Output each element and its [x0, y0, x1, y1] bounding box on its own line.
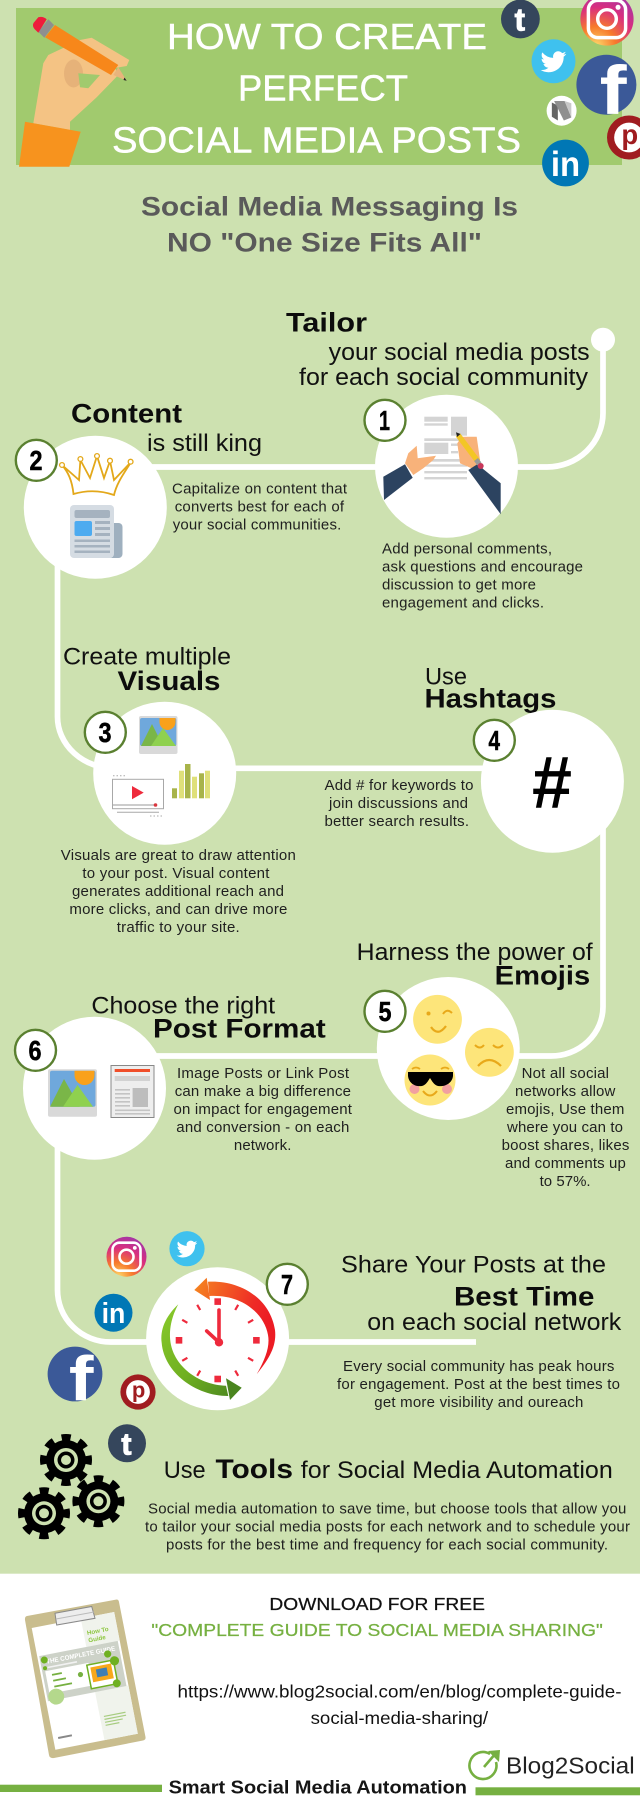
social icons around clock — [48, 1231, 205, 1462]
footer tagline with green rules — [0, 1777, 640, 1797]
icon: facebook — [48, 1345, 102, 1415]
circle illustration: hands editing document — [375, 395, 518, 538]
number badge 5 — [364, 991, 406, 1032]
number badge 3: 3 — [98, 717, 112, 748]
step 2: content — [16, 399, 348, 579]
icon: pinterest — [607, 116, 640, 160]
circle illustration: image, video and chart — [93, 702, 236, 845]
icon: linkedin — [94, 1294, 132, 1332]
icon: green circular arrow — [161, 1304, 242, 1400]
icon: medium — [547, 96, 577, 126]
heading: hashtags: Hashtags — [424, 683, 556, 713]
step 1: tailor — [286, 308, 590, 611]
body text: step 4: Add # for keywords to — [324, 777, 474, 794]
body text: step 7: Every social community has peak hours — [343, 1358, 614, 1375]
text: url: https://www.blog2social.com/en/blog/complete-guide- — [178, 1682, 622, 1702]
heading: visuals — [63, 644, 231, 696]
heading: emojis — [357, 939, 593, 990]
icon: instagram — [580, 0, 634, 46]
step 5: emojis — [357, 939, 629, 1190]
icon: linkedin: in — [551, 145, 580, 184]
text: download for free — [151, 1594, 603, 1640]
subtitle — [141, 192, 518, 258]
number badge 7: 7 — [281, 1269, 293, 1300]
icon: twitter — [169, 1231, 205, 1266]
connector path: step 2 to step 4 — [58, 507, 552, 768]
text: download for free: DOWNLOAD FOR FREE — [269, 1594, 485, 1614]
icon: red circular arrow — [194, 1278, 275, 1374]
icon: tumblr: t — [515, 3, 525, 38]
icon: twitter — [532, 39, 576, 83]
body text: step 4 — [324, 777, 474, 830]
body text: step 7: for engagement. Post at the best times to — [337, 1376, 620, 1393]
body text: tools — [145, 1500, 630, 1553]
icon: pinterest — [120, 1374, 156, 1410]
number badge 5: 5 — [378, 996, 392, 1027]
heading: visuals: Create multiple — [63, 644, 231, 671]
icon: sunglasses emoji — [404, 1054, 456, 1106]
icon: tumblr — [108, 1424, 146, 1462]
body text: tools: posts for the best time and frequency for each social community. — [166, 1536, 608, 1553]
heading: post format — [91, 992, 326, 1043]
heading: tailor: for each social community — [299, 364, 588, 391]
heading: content: is still king — [147, 430, 262, 457]
heading: post format: Post Format — [153, 1013, 326, 1043]
icon: sad emoji — [465, 1028, 514, 1077]
circle illustration: clock with arrows — [146, 1267, 289, 1410]
icon: facebook: f — [69, 1345, 95, 1415]
text: url: social-media-sharing/ — [311, 1708, 488, 1728]
number badge 2: 2 — [30, 445, 42, 476]
number badge 4: 4 — [488, 725, 500, 756]
body text: step 6: on impact for engagement — [174, 1101, 353, 1118]
icon: clipboard with guide: Guide — [88, 1634, 107, 1644]
body text: step 5: and comments up — [505, 1155, 626, 1172]
body text: step 1: engagement and clicks. — [382, 594, 544, 611]
circle illustration: hash symbol — [481, 710, 624, 853]
icon: pinterest: p — [132, 1377, 145, 1402]
heading: visuals: Visuals — [118, 666, 220, 696]
body text: step 5: to 57%. — [540, 1173, 591, 1190]
circle illustration: hash symbol: # — [532, 741, 572, 824]
heading: post format: Choose the right — [91, 992, 275, 1019]
heading: tools: for Social Media Automation — [301, 1457, 613, 1484]
icon: clipboard with guide: THE COMPLETE GUIDE — [46, 1645, 116, 1666]
title — [112, 16, 521, 160]
icon: facebook — [576, 52, 636, 129]
heading: best time: Best Time — [454, 1281, 594, 1311]
heading: emojis: Emojis — [495, 960, 590, 990]
heading: tailor: your social media posts — [329, 339, 590, 366]
step 3: visuals — [61, 644, 296, 936]
heading: content: Content — [71, 399, 182, 429]
connector path: start dot to step 2 — [95, 328, 615, 467]
number badge 2 — [16, 440, 57, 481]
body text: step 2: your social communities. — [173, 516, 341, 533]
body text: step 4: better search results. — [324, 813, 469, 830]
body text: step 1: Add personal comments, — [382, 540, 552, 557]
body text: step 1: discussion to get more — [382, 576, 536, 593]
body text: step 2: converts best for each of — [175, 498, 345, 515]
subtitle: Social Media Messaging Is — [141, 192, 518, 222]
number badge 6: 6 — [28, 1035, 42, 1066]
icon: winking emoji — [413, 995, 462, 1044]
icon: clipboard with guide: How To — [86, 1626, 109, 1637]
icon: gears — [22, 1438, 121, 1536]
icon: clipboard with guide — [25, 1600, 146, 1758]
body text: step 4: join discussions and — [328, 795, 468, 812]
body text: step 3: more clicks, and can drive more — [69, 901, 287, 918]
heading: tools: Use — [164, 1457, 206, 1484]
header banner — [16, 8, 622, 167]
body text: step 5 — [502, 1065, 629, 1190]
step 6: post format — [15, 992, 353, 1160]
heading: emojis: Harness the power of — [357, 939, 593, 966]
icon: linkedin — [542, 140, 589, 186]
subtitle: NO "One Size Fits All" — [167, 228, 482, 258]
circle illustration: image post and link post — [23, 1017, 166, 1160]
heading: best time — [341, 1252, 622, 1336]
title: HOW TO CREATE — [167, 16, 487, 57]
connector path: step 4 to step 6 — [95, 781, 603, 1056]
text: url — [178, 1682, 622, 1728]
heading: hashtags: Use — [425, 663, 467, 690]
number badge 6 — [15, 1030, 56, 1071]
step 7: best time — [146, 1252, 622, 1411]
text: download for free: "COMPLETE GUIDE TO SOCIAL MEDIA SHARING" — [151, 1620, 603, 1640]
body text: step 6: can make a big difference — [175, 1083, 351, 1100]
body text: step 7 — [337, 1358, 620, 1411]
icon: hand holding pencil — [19, 17, 129, 167]
number badge 3 — [85, 712, 126, 753]
header social icons — [501, 0, 640, 186]
body text: step 3: traffic to your site. — [117, 919, 240, 936]
body text: step 6: and conversion - on each — [176, 1119, 349, 1136]
logo: blog2social: Blog2Social — [506, 1752, 635, 1778]
footer tagline with green rules: Smart Social Media Automation — [169, 1777, 467, 1797]
icon: pinterest: p — [621, 119, 638, 150]
body text: step 5: networks allow — [515, 1083, 616, 1100]
connector path: step 6 to step 7 — [58, 1088, 476, 1342]
step 4: hashtags — [324, 663, 624, 853]
heading: content — [71, 399, 262, 457]
clock ticks — [176, 1298, 260, 1382]
body text: step 1 — [382, 540, 583, 611]
body text: step 3: generates additional reach and — [72, 883, 284, 900]
icon: instagram — [106, 1237, 146, 1277]
circle illustration: emoji faces — [377, 977, 520, 1120]
icon: tumblr: t — [121, 1428, 131, 1462]
heading: tools: Tools — [216, 1454, 293, 1484]
logo: blog2social — [469, 1750, 635, 1779]
body text: step 2: Capitalize on content that — [172, 480, 348, 497]
body text: step 5: where you can to — [506, 1119, 623, 1136]
body text: step 7: get more visibility and oureach — [374, 1394, 583, 1411]
body text: tools: Social media automation to save time, but choose tools that allow you — [148, 1500, 626, 1517]
heading: best time: on each social network — [367, 1309, 622, 1336]
heading: tailor: Tailor — [286, 308, 367, 338]
icon: facebook: f — [600, 52, 628, 129]
number badge 4 — [474, 720, 515, 761]
body text: step 5: emojis, Use them — [506, 1101, 624, 1118]
heading: tailor — [286, 308, 590, 391]
body text: step 5: boost shares, likes — [502, 1137, 629, 1154]
body text: step 1: ask questions and encourage — [382, 558, 583, 575]
number badge 1: 1 — [379, 405, 390, 436]
body text: step 2 — [172, 480, 348, 533]
heading: best time: Share Your Posts at the — [341, 1252, 606, 1279]
body text: step 6 — [174, 1065, 353, 1154]
body text: step 3: Visuals are great to draw attention — [61, 847, 296, 864]
circle illustration: crown and newspaper — [24, 436, 167, 579]
icon: tumblr — [501, 0, 540, 38]
body text: step 5: Not all social — [522, 1065, 609, 1082]
title: PERFECT — [238, 68, 408, 109]
icon: linkedin: in — [102, 1298, 125, 1330]
body text: step 6: Image Posts or Link Post — [177, 1065, 350, 1082]
heading: tools — [164, 1454, 613, 1484]
number badge 7 — [267, 1264, 308, 1305]
body text: tools: to tailor your social media posts for each network and to schedule your — [145, 1518, 630, 1535]
number badge 1 — [364, 400, 406, 441]
body text: step 3: to your post. Visual content — [82, 865, 270, 882]
body text: step 3 — [61, 847, 296, 936]
footer panel — [0, 1574, 640, 1800]
body text: step 6: network. — [234, 1137, 291, 1154]
title: SOCIAL MEDIA POSTS — [112, 119, 521, 160]
heading: hashtags — [424, 663, 556, 713]
